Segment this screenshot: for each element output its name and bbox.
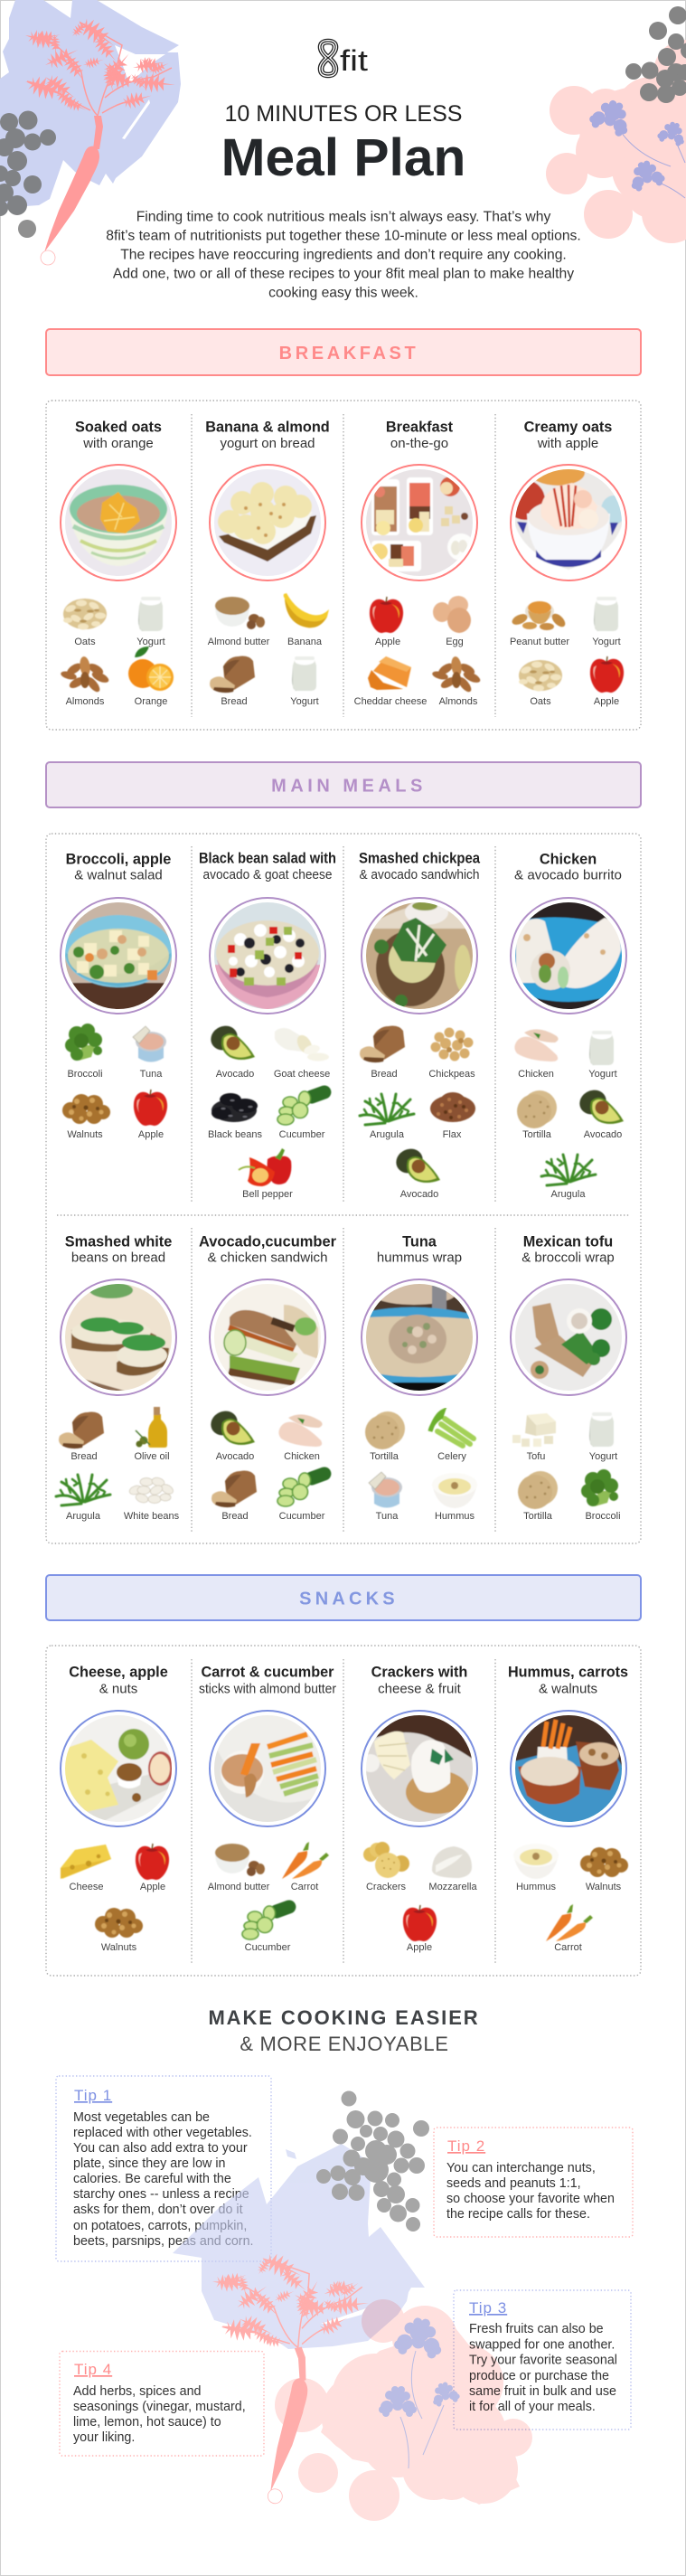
tip 2: You can interchange nuts, [446,2161,596,2175]
ingredient: Carrot: Carrot [554,1942,582,1953]
recipe: crackers with cheese: Crackers with [371,1665,467,1681]
ingredient: Arugula: Arugula [66,1511,101,1522]
recipe: cheese, apple: & nuts [99,1682,137,1697]
logo: 8fit [321,42,368,77]
ingredient: Avocado: Avocado [216,1069,254,1080]
recipe: broccoli, apple [66,852,171,883]
ingredient: Flax [430,1092,475,1140]
ingredient: Yogurt [588,1031,617,1080]
decoration: top left gray dots [0,110,56,238]
ingredient: Celery [430,1411,474,1462]
ingredient: Tuna [133,1026,166,1080]
ingredient: Cucumber [277,1083,333,1140]
tip 3: produce or purchase the [469,2369,609,2383]
recipe: carrot & cucumber: sticks with almond butter [199,1682,336,1697]
heading: make cooking easier [208,2006,480,2055]
ingredient: Apple: Apple [594,696,619,707]
recipe: chicken burrito: & avocado burrito [514,868,622,883]
ingredient: Bell pepper: Bell pepper [242,1189,293,1200]
ingredient: Bread [59,1412,104,1462]
ingredient: Bread [210,656,255,707]
recipe: avocado, cucumber [199,1234,337,1266]
recipe: banana & almond: Banana & almond [205,420,330,436]
ingredient: Bread: Bread [371,1069,398,1080]
ingredient: Crackers: Crackers [366,1882,406,1892]
recipe: creamy oats [524,420,612,451]
ingredient: Oats: Oats [74,637,96,647]
ingredient: Goat cheese [274,1028,330,1080]
recipe: tuna hummus wrap: hummus wrap [377,1250,462,1266]
ingredient: Avocado [576,1086,624,1140]
ingredient: Mozzarella: Mozzarella [428,1882,477,1892]
panel: main meals [46,834,641,1543]
ingredient: Avocado: Avocado [216,1451,254,1462]
recipe: crackers with cheese: cheese & fruit [378,1682,462,1697]
ingredient: Cheddar cheese: Cheddar cheese [354,696,427,707]
ingredient: Tortilla [365,1411,405,1462]
recipe: chicken burrito [514,852,622,883]
tip 4: your liking. [73,2430,135,2445]
tip 1: beets, parsnips, peas and corn. [73,2234,253,2249]
ingredient: Avocado [392,1145,440,1200]
ingredient: Oats [63,599,107,647]
heading: make cooking easier: MAKE COOKING EASIER [208,2006,480,2029]
recipe: breakfast on-the-go [386,420,454,451]
title: 10 MINUTES OR LESS [224,101,463,127]
recipe: smashed white beans: Smashed white [65,1234,172,1250]
ingredient: Almond butter [208,597,270,647]
tip 2 [434,2128,633,2237]
ingredient: Apple: Apple [140,1882,165,1892]
tip 1: Most vegetables can be [73,2110,210,2125]
ingredient: Tortilla: Tortilla [370,1451,399,1462]
photo: avocado sandwich [210,1279,325,1395]
tip 1: plate, since they are low in [73,2156,226,2171]
ingredient: Tuna: Tuna [140,1069,163,1080]
ingredient: Almond butter: Almond butter [208,637,270,647]
ingredient: Arugula [56,1475,110,1522]
ingredient: Goat cheese: Goat cheese [274,1069,330,1080]
ingredient: Tuna: Tuna [376,1511,399,1522]
tip 2: so choose your favorite when [446,2192,615,2206]
ingredient: Apple [370,597,403,647]
ingredient: Almond butter [208,1844,270,1892]
panel: snacks [46,1646,641,1976]
tip 3: Fresh fruits can also be [469,2322,604,2336]
recipe: broccoli, apple: Broccoli, apple [66,852,171,868]
decoration: bottom gray dots [316,2090,429,2232]
section header: main meals: MAIN MEALS [271,776,427,796]
ingredient: Yogurt: Yogurt [588,1069,617,1080]
ingredient: Yogurt: Yogurt [589,1451,617,1462]
ingredient: Apple: Apple [407,1942,432,1953]
ingredient: Hummus: Hummus [435,1511,475,1522]
ingredient: Cheese [61,1845,111,1892]
tip 3: Try your favorite seasonal [469,2353,617,2367]
photo: breakfast boxes [362,465,477,580]
tip 1: calories. Be careful with the [73,2172,231,2186]
decoration: top left brush [0,0,181,208]
photo: chickpea sandwich [362,898,477,1014]
ingredient: Cheese: Cheese [70,1882,103,1892]
tip 1: You can also add extra to your [73,2141,248,2156]
ingredient: Egg: Egg [446,637,464,647]
recipe: avocado, cucumber: Avocado,cucumber [199,1234,337,1250]
photo: crackers and cheese [362,1711,477,1826]
ingredient: Avocado: Avocado [584,1129,622,1140]
recipe: broccoli, apple: & walnut salad [74,868,163,883]
decoration: top right gray dots [625,6,686,103]
recipe: smashed chickpea: Smashed chickpea [359,851,481,867]
ingredient: Peanut butter: Peanut butter [510,637,569,647]
tip 1: replaced with other vegetables. [73,2126,252,2140]
ingredient: Hummus [513,1844,559,1892]
ingredient: Tofu: Tofu [527,1451,545,1462]
ingredient: Chicken [514,1029,559,1080]
recipe: carrot & cucumber: Carrot & cucumber [201,1665,334,1681]
ingredient: Tofu [512,1413,556,1462]
ingredient: Cucumber: Cucumber [279,1511,325,1522]
ingredient: Apple [134,1090,167,1140]
recipe: banana & almond: yogurt on bread [220,436,315,451]
ingredient: Mozzarella [428,1846,477,1892]
ingredient: Crackers [363,1842,409,1892]
photo: creamy oats [505,460,626,580]
ingredient: Chicken: Chicken [284,1451,320,1462]
section header: breakfast: BREAKFAST [279,344,418,363]
decoration: bottom pink blob [275,2299,532,2521]
ingredient: Black beans [208,1093,262,1140]
tip 1: starchy ones -- unless a recipe [73,2187,249,2202]
ingredient: Arugula: Arugula [370,1129,405,1140]
ingredient: Tuna [369,1472,402,1522]
ingredient: Carrot [282,1842,329,1892]
ingredient: Walnuts: Walnuts [67,1129,103,1140]
ingredient: Walnuts [62,1094,110,1140]
recipe: mexican tofu [522,1234,615,1266]
ingredient: Orange [128,646,174,707]
ingredient: Tortilla [517,1090,557,1140]
recipe: creamy oats: with apple [537,436,598,451]
ingredient: Chicken: Chicken [518,1069,554,1080]
recipe: mexican tofu: & broccoli wrap [522,1250,615,1266]
ingredient: Apple: Apple [375,637,400,647]
recipe: black bean salad: avocado & goat cheese [202,867,333,882]
recipe: soaked oats: Soaked oats [75,420,162,436]
ingredient: Broccoli [581,1469,621,1522]
decoration: top right leaves [587,95,686,198]
ingredient: Almond butter: Almond butter [208,1882,270,1892]
tip 4: Add herbs, spices and [73,2384,202,2399]
tip 3: swapped for one another. [469,2338,615,2353]
ingredient: Yogurt: Yogurt [290,696,319,707]
ingredient: Hummus: Hummus [516,1882,556,1892]
intro text: 8fit’s team of nutritionists put together these 10-minute or less meal options. [106,228,581,244]
intro text: Finding time to cook nutritious meals isn’t always easy. That’s why [136,210,550,224]
tip 4: seasonings (vinegar, mustard, [73,2400,246,2414]
ingredient: Avocado [207,1022,255,1080]
ingredient: White beans: White beans [124,1511,180,1522]
tip 4 [60,2351,264,2456]
recipe: hummus, carrots: & walnuts [539,1682,597,1697]
photo: tofu wrap [511,1279,626,1395]
ingredient: Broccoli: Broccoli [585,1511,621,1522]
ingredient: Yogurt [136,597,165,647]
recipe: tuna hummus wrap [377,1234,462,1266]
tip 1: on potatoes, carrots, pumpkin, [73,2219,247,2233]
ingredient: Avocado [207,1407,255,1462]
decoration: bottom brush [173,2144,425,2349]
ingredient: Egg [433,596,471,647]
photo: soaked oats [61,465,176,580]
ingredient: Yogurt: Yogurt [592,637,621,647]
recipe: cheese, apple [69,1665,168,1697]
ingredient: Yogurt [589,1412,617,1462]
ingredient: Peanut butter [510,601,569,647]
ingredient: Carrot [546,1904,593,1953]
ingredient: Banana: Banana [287,637,323,647]
photo: white beans on bread [61,1279,176,1395]
ingredient: White beans [124,1477,180,1522]
decoration: top right pink blob [546,40,686,243]
ingredient: Almonds [431,656,482,707]
recipe: mexican tofu: Mexican tofu [523,1234,613,1250]
ingredient: Almonds: Almonds [66,696,105,707]
decoration: top left carrot [22,12,176,265]
intro text: The recipes have reoccuring ingredients and don’t require any cooking. [120,248,567,262]
tip 4: lime, lemon, hot sauce) to [73,2415,221,2430]
tip 3: it for all of your meals. [469,2400,596,2414]
tip 1 [56,2076,271,2261]
panel: breakfast [46,401,641,730]
ingredient: Olive oil [134,1407,170,1462]
ingredient: Arugula [541,1155,596,1200]
ingredient: Chickpeas: Chickpeas [428,1069,475,1080]
ingredient: Flax: Flax [443,1129,462,1140]
ingredient: Orange: Orange [135,696,167,707]
tip 1: Tip 1 [74,2087,112,2104]
section header: main meals [46,762,641,807]
ingredient: Tortilla: Tortilla [523,1511,553,1522]
recipe: hummus, carrots: Hummus, carrots [508,1665,628,1681]
ingredient: Yogurt [592,597,621,647]
ingredient: Chickpeas [428,1027,475,1080]
tip 2: Tip 2 [447,2137,485,2155]
photo: tuna wrap [362,1279,477,1395]
ingredient: Walnuts [580,1847,628,1892]
ingredient: Arugula [360,1094,414,1140]
ingredient: Cucumber [242,1898,297,1953]
photo: banana toast [210,465,325,580]
ingredient: Apple [403,1905,437,1953]
recipe: soaked oats: with orange [82,436,154,451]
tip 3 [454,2290,631,2430]
tip 3: same fruit in bulk and use [469,2384,616,2399]
recipe: smashed white beans: beans on bread [71,1250,165,1266]
recipe: smashed chickpea [359,851,481,882]
tip 1: asks for them, don’t over do it [73,2203,243,2217]
ingredient: Broccoli: Broccoli [67,1069,103,1080]
photo: hummus and carrots [511,1711,626,1826]
photo: broccoli salad [61,898,176,1014]
intro text [106,210,581,300]
recipe: breakfast on-the-go: on-the-go [390,436,448,451]
recipe: smashed chickpea: & avocado sandwhich [360,867,479,882]
heading: make cooking easier: & MORE ENJOYABLE [240,2033,449,2055]
photo: carrot and cucumber [210,1711,325,1826]
ingredient: Bread [360,1026,405,1080]
ingredient: Banana [284,593,329,647]
ingredient: Cucumber: Cucumber [245,1942,291,1953]
tip 2: seeds and peanuts 1:1, [446,2176,581,2191]
section header: breakfast [46,329,641,375]
recipe: chicken burrito: Chicken [540,852,597,868]
ingredient: Yogurt: Yogurt [136,637,165,647]
section header: snacks: SNACKS [299,1590,399,1609]
logo: 8fit: fit [340,44,368,77]
ingredient: Almonds: Almonds [439,696,478,707]
ingredient: Tortilla: Tortilla [522,1129,552,1140]
recipe: avocado, cucumber: & chicken sandwich [208,1250,327,1266]
ingredient: Almonds [60,656,110,707]
ingredient: Oats: Oats [530,696,551,707]
ingredient: Cucumber [277,1465,333,1522]
recipe: black bean salad [199,851,336,882]
ingredient: Bread: Bread [70,1451,98,1462]
recipe: soaked oats [75,420,162,451]
photo: chicken burrito [511,898,626,1014]
recipe: crackers with cheese [371,1665,467,1697]
intro text: cooking easy this week. [268,286,418,300]
recipe: creamy oats: Creamy oats [524,420,612,436]
ingredient: Apple [590,656,624,707]
ingredient: Celery: Celery [437,1451,466,1462]
ingredient: Bell pepper [239,1148,293,1200]
tip 3: Tip 3 [469,2299,507,2317]
ingredient: Chicken [278,1414,323,1462]
ingredient: Avocado: Avocado [400,1189,438,1200]
section header: snacks [46,1575,641,1620]
ingredient: Arugula: Arugula [551,1189,586,1200]
recipe: smashed white beans [65,1234,172,1266]
decoration: bottom leaves [379,2315,461,2468]
ingredient: Bread [211,1471,257,1522]
decoration: bottom carrot [204,2232,402,2508]
recipe: breakfast on-the-go: Breakfast [386,420,454,436]
ingredient: Cheddar cheese [354,656,427,707]
ingredient: Walnuts: Walnuts [101,1942,137,1953]
photo: cheese and apple [61,1711,176,1826]
ingredient: Bread: Bread [221,696,248,707]
ingredient: Olive oil: Olive oil [134,1451,170,1462]
tip 2: the recipe calls for these. [446,2207,590,2222]
intro text: Add one, two or all of these recipes to your 8fit meal plan to make healthy [113,266,574,282]
tip 4: Tip 4 [74,2361,112,2378]
recipe: black bean salad: Black bean salad with [199,851,336,867]
ingredient: Apple [136,1844,169,1892]
recipe: hummus, carrots [508,1665,628,1697]
ingredient: Bread: Bread [221,1511,249,1522]
title [221,101,465,187]
ingredient: Tortilla [518,1471,558,1522]
recipe: carrot & cucumber [199,1665,336,1697]
recipe: cheese, apple: Cheese, apple [69,1665,168,1681]
ingredient: Broccoli [65,1024,103,1080]
ingredient: Apple: Apple [138,1129,164,1140]
ingredient: Hummus [432,1473,477,1522]
ingredient: Black beans: Black beans [208,1129,262,1140]
title: Meal Plan [221,128,465,187]
ingredient: Walnuts [95,1908,143,1953]
ingredient: Walnuts: Walnuts [586,1882,622,1892]
recipe: tuna hummus wrap: Tuna [402,1234,437,1250]
ingredient: Cucumber: Cucumber [279,1129,325,1140]
photo: black bean salad [210,898,325,1014]
recipe: banana & almond [205,420,330,451]
ingredient: Oats [519,660,562,707]
ingredient: Yogurt [290,656,319,707]
ingredient: Carrot: Carrot [291,1882,318,1892]
